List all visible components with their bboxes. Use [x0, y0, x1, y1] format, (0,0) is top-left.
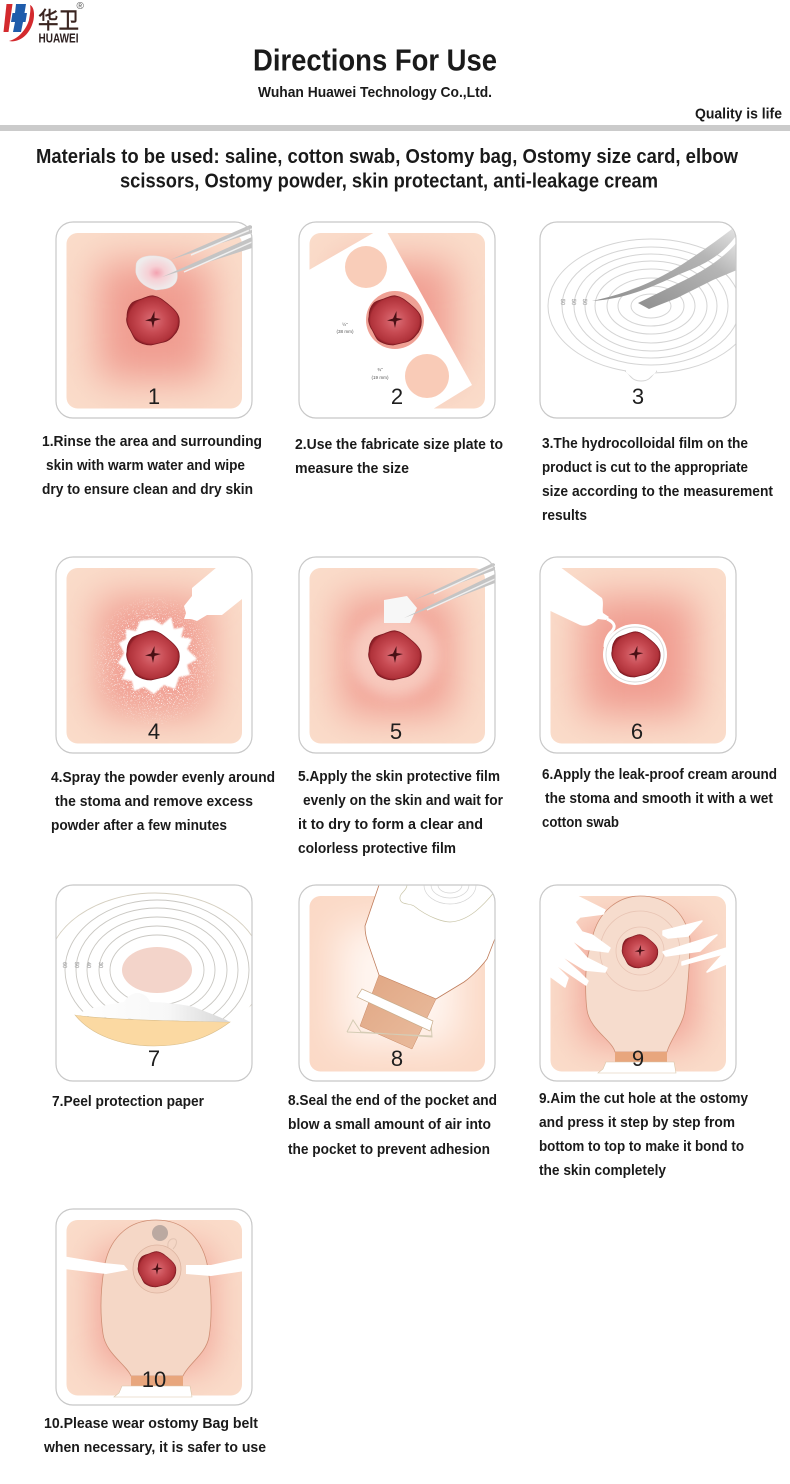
label 19 mm: ¾": [377, 367, 383, 372]
flange ring: [133, 1245, 181, 1293]
closure clip: [114, 1386, 192, 1397]
ring size labels: [61, 962, 103, 968]
step 2 text: measure the size: [295, 461, 409, 477]
step number: 10: [142, 1367, 166, 1392]
pouch tail: [360, 975, 436, 1049]
step 3 text: results: [542, 508, 587, 524]
pouch flange: [400, 886, 492, 922]
stoma: [127, 296, 179, 345]
card hole top: [345, 246, 387, 288]
step 8 text: [288, 1093, 497, 1158]
protective film haze: [351, 613, 439, 697]
pouch: [586, 896, 690, 1052]
label 19 mm: [371, 367, 389, 380]
flange rings: [600, 911, 680, 991]
step 5 text: it to dry to form a clear and: [298, 817, 483, 833]
cap circle: [152, 1225, 168, 1241]
stoma: [612, 632, 660, 677]
step 9 text: [539, 1091, 748, 1179]
step 2 text: [295, 437, 503, 477]
materials list: Materials to be used: saline, cotton swab, Ostomy bag, Ostomy size card, elbow: [36, 146, 738, 168]
step 1 text: dry to ensure clean and dry skin: [42, 482, 253, 498]
powder scatter: [93, 597, 217, 725]
ring size labels: 50: [559, 299, 565, 305]
logo latin name: HUAWEI: [38, 32, 78, 46]
step 5 text: 5.Apply the skin protective film: [298, 769, 500, 785]
logo Chinese name: 华卫: [38, 7, 79, 33]
step number: 1: [148, 384, 160, 409]
ring size labels: 30: [97, 962, 103, 968]
light skin background: [310, 896, 485, 1072]
stoma: [369, 631, 421, 680]
left hand: [550, 896, 611, 988]
step 8 text: 8.Seal the end of the pocket and: [288, 1093, 497, 1109]
step 3 text: product is cut to the appropriate: [542, 460, 748, 476]
ring size labels: [559, 299, 587, 305]
step 4 text: 4.Spray the powder evenly around: [51, 770, 275, 786]
card hole bottom: [405, 354, 449, 398]
pouch body: [365, 885, 496, 999]
pouch: [101, 1220, 211, 1376]
cotton swab: [136, 256, 177, 290]
cream tube: [550, 568, 609, 626]
panel 3: cutting the film: [540, 222, 754, 418]
label 38 mm: [336, 321, 354, 334]
stoma: [127, 631, 179, 680]
stoma: [369, 296, 421, 345]
step number: 9: [632, 1046, 644, 1071]
ring size labels: 50: [570, 299, 576, 305]
pouch band: [131, 1376, 183, 1386]
ring size labels: 60: [61, 962, 67, 968]
right hand: [663, 921, 736, 972]
step 5 text: colorless protective film: [298, 841, 456, 857]
ring size labels: 40: [85, 962, 91, 968]
logo registered mark: ®: [76, 1, 84, 12]
pouch band: [615, 1052, 667, 1062]
step 5 text: [298, 769, 503, 857]
ring size labels: 50: [73, 962, 79, 968]
size card: [309, 232, 472, 409]
panel 10: ostomy belt: [56, 1209, 252, 1405]
step number: 5: [390, 719, 402, 744]
logo mark: red H and blue cross: [4, 4, 34, 41]
cut hole: [122, 947, 192, 993]
scissors: [592, 229, 737, 309]
film wipe: [384, 596, 417, 623]
panel 8: seal the pocket: [299, 866, 496, 1081]
size rings: [56, 892, 252, 1021]
cream ring: [603, 619, 667, 685]
panel 2: size plate: [299, 222, 495, 418]
panel 9: press onto skin: [540, 885, 736, 1081]
peeled paper: [75, 993, 230, 1022]
powder bottle: [184, 568, 242, 621]
step 9 text: the skin completely: [539, 1163, 666, 1179]
step 4 text: powder after a few minutes: [51, 818, 227, 834]
step 3 text: [542, 436, 773, 524]
panel 7: peel protection paper: [47, 885, 263, 1081]
card hole middle: [366, 291, 424, 349]
closure clip: [357, 989, 433, 1031]
step 9 text: 9.Aim the cut hole at the ostomy: [539, 1091, 748, 1107]
tweezers: [404, 563, 495, 618]
panel 4: powder: [56, 557, 252, 753]
step 2 text: 2.Use the fabricate size plate to: [295, 437, 503, 453]
step 1 text: skin with warm water and wipe: [46, 458, 245, 474]
step number: 8: [391, 1046, 403, 1071]
company name: Wuhan Huawei Technology Co.,Ltd.: [258, 84, 492, 101]
panel 1: rinse: [56, 222, 252, 418]
step 9 text: bottom to top to make it bond to: [539, 1139, 744, 1155]
stoma: [622, 934, 658, 968]
flange tab: [168, 1239, 176, 1249]
step 10 text: 10.Please wear ostomy Bag belt: [44, 1416, 258, 1432]
step 1 text: 1.Rinse the area and surrounding: [42, 434, 262, 450]
materials list: scissors, Ostomy powder, skin protectant, anti-leakage cream: [120, 170, 658, 192]
stoma: [138, 1252, 176, 1287]
label 38 mm: (38 mm): [336, 329, 354, 334]
right belt: [186, 1258, 242, 1276]
panel 5: skin protective film: [299, 557, 495, 753]
tail clip back: [347, 1020, 432, 1037]
step 6 text: the stoma and smooth it with a wet: [545, 791, 773, 807]
step 5 text: evenly on the skin and wait for: [303, 793, 503, 809]
step number: 3: [632, 384, 644, 409]
step 6 text: 6.Apply the leak-proof cream around: [542, 767, 777, 783]
step 10 text: [43, 1416, 266, 1456]
step 4 text: the stoma and remove excess: [55, 794, 253, 810]
label 19 mm: (19 mm): [371, 375, 389, 380]
step 8 text: the pocket to prevent adhesion: [288, 1142, 490, 1158]
step 9 text: and press it step by step from: [539, 1115, 735, 1131]
materials list: [36, 146, 738, 192]
step 6 text: [542, 767, 777, 831]
backing film: [75, 1015, 230, 1046]
size rings: [548, 239, 754, 381]
step 10 text: when necessary, it is safer to use: [43, 1440, 266, 1456]
header divider bar: [0, 125, 790, 131]
ring size labels: 50: [581, 299, 587, 305]
panel 6: leak-proof cream: [540, 557, 736, 753]
step 3 text: size according to the measurement: [542, 484, 773, 500]
step 4 text: [51, 770, 275, 834]
label 38 mm: ½": [342, 321, 348, 327]
logo: [4, 1, 84, 46]
step 8 text: blow a small amount of air into: [288, 1117, 491, 1133]
step 1 text: [42, 434, 262, 498]
title: Directions For Use: [253, 42, 497, 78]
lower white cover: [56, 1001, 252, 1048]
closure clip: [598, 1062, 676, 1073]
step number: 2: [391, 384, 403, 409]
step number: 4: [148, 719, 160, 744]
step number: 6: [631, 719, 643, 744]
slogan: Quality is life: [695, 106, 782, 122]
step 3 text: 3.The hydrocolloidal film on the: [542, 436, 748, 452]
step number: 7: [148, 1046, 160, 1071]
left belt: [66, 1256, 128, 1274]
step 6 text: cotton swab: [542, 815, 619, 831]
tweezers: [162, 225, 252, 277]
powder burst: [118, 617, 197, 694]
step 7 text: 7.Peel protection paper: [52, 1094, 204, 1110]
